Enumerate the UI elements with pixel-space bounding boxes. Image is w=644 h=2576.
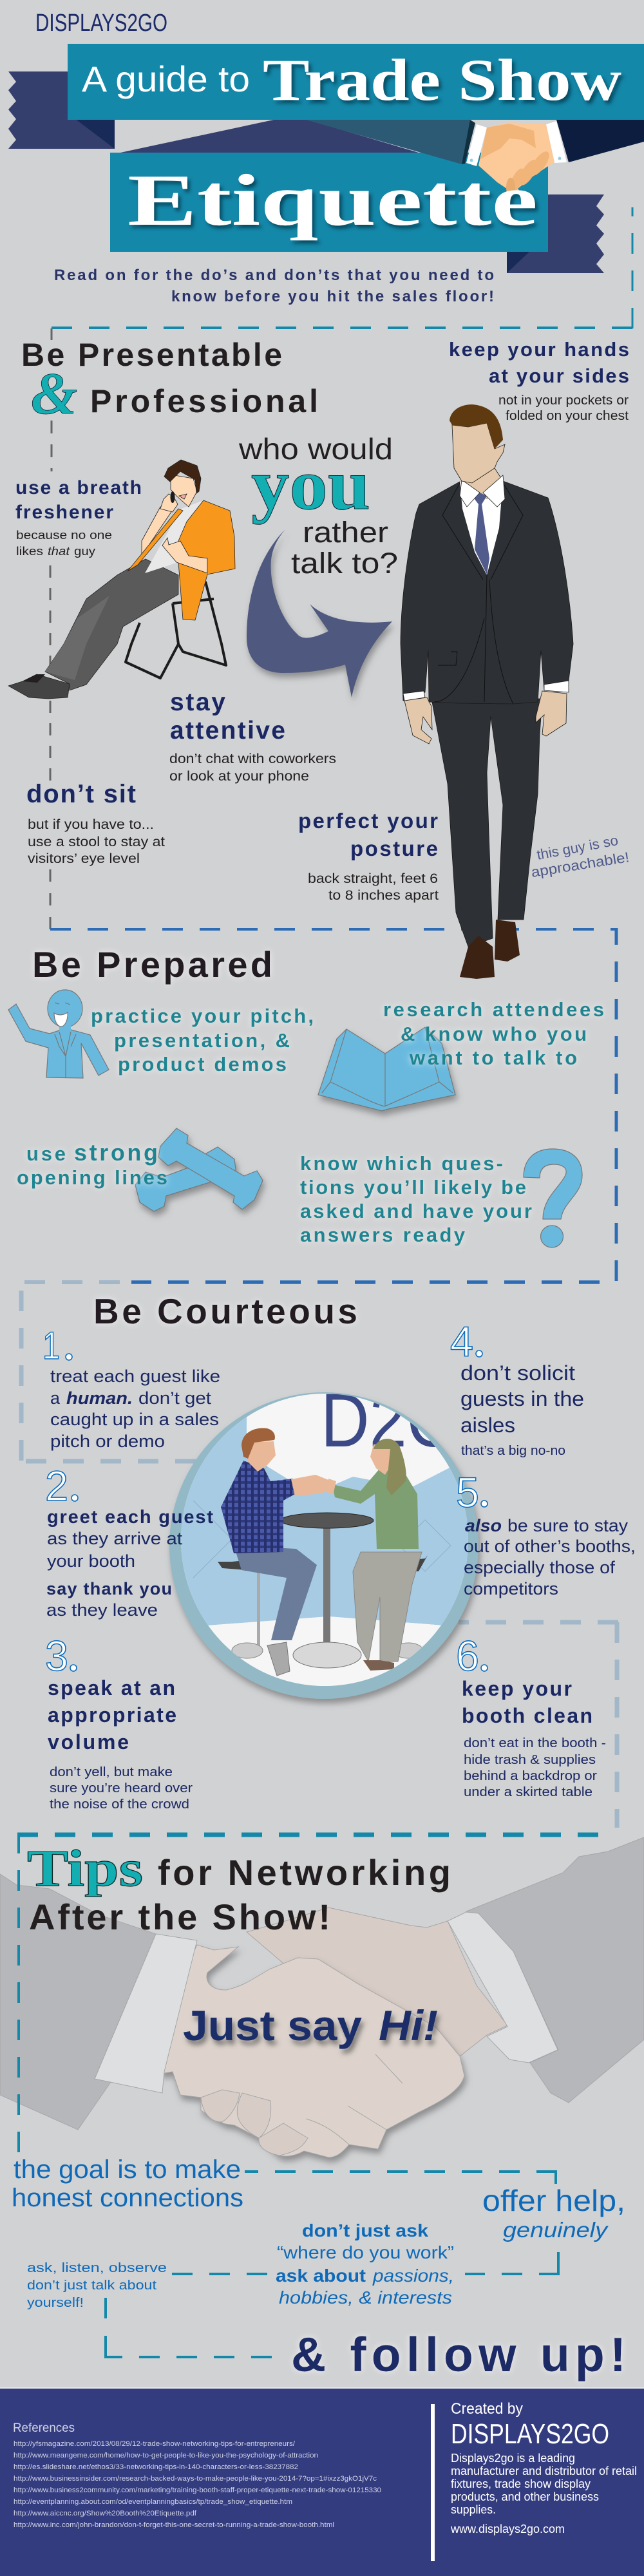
tip: practice your pitch: practice your pitch, bbox=[91, 1005, 314, 1027]
tip: keep your hands at your sides: not in your pockets or bbox=[498, 393, 629, 408]
table bbox=[281, 1513, 374, 1668]
step 6: booth clean bbox=[462, 1704, 592, 1727]
heading: Tips for Networking After the Show: for Networking bbox=[158, 1852, 451, 1893]
tip: perfect your posture: to 8 inches apart bbox=[328, 888, 439, 903]
stool right bbox=[399, 1555, 428, 1659]
tip: research attendees: want to talk to bbox=[409, 1046, 577, 1069]
tip: use a breath freshener bbox=[15, 477, 142, 558]
lapel lines bbox=[434, 483, 523, 704]
arrow pointing to suited man bbox=[247, 529, 392, 697]
illustration: man in suit bbox=[401, 404, 573, 979]
step 4: guests in the bbox=[460, 1387, 584, 1410]
tip: ask, listen, observe: don’t just talk about bbox=[27, 2278, 157, 2293]
created by block: fixtures, trade show display bbox=[451, 2477, 591, 2490]
intro text: know before you hit the sales floor! bbox=[171, 288, 494, 305]
step 4: that’s a big no-no bbox=[461, 1444, 565, 1458]
hands bbox=[404, 697, 432, 744]
step 6: keep your bbox=[462, 1677, 572, 1700]
step 3 bbox=[45, 1632, 193, 1812]
title text: Etiquette: Etiquette bbox=[128, 159, 538, 241]
title text: A guide to: A guide to bbox=[82, 59, 250, 99]
step 5 bbox=[456, 1468, 636, 1598]
step 6: don’t eat in the booth - bbox=[464, 1736, 606, 1750]
icon: open book bbox=[318, 1027, 455, 1111]
tip: use a breath freshener: guy bbox=[74, 545, 95, 558]
step 6 bbox=[456, 1632, 606, 1799]
tip: don't sit: use a stool to stay at bbox=[28, 835, 165, 849]
tip: don't sit: but if you have to... bbox=[28, 817, 154, 832]
logo: Displays2go: DISPLAYS2GO bbox=[35, 10, 167, 37]
banner bottom bbox=[110, 153, 548, 252]
tip: perfect your posture: posture bbox=[350, 837, 438, 860]
references: http://www.businessinsider.com/research-backed-ways-to-make-people-like-you-2014-7?op=1#ixzz3gkO1jV7c bbox=[14, 2475, 377, 2483]
tip: practice your pitch: product demos bbox=[118, 1053, 287, 1075]
tip: keep your hands at your sides: folded on your chest bbox=[506, 409, 629, 423]
step 3: the noise of the crowd bbox=[50, 1797, 189, 1812]
callout: Just say Hi!: Just say bbox=[183, 2002, 362, 2049]
ribbon fold left bbox=[64, 111, 115, 149]
step 6: 6 bbox=[456, 1632, 479, 1680]
tip: ask, listen, observe: yourself! bbox=[27, 2296, 84, 2310]
step 2: say thank you bbox=[46, 1579, 172, 1598]
heading: Tips for Networking After the Show bbox=[27, 1841, 451, 1937]
callout: Just say Hi! bbox=[183, 2002, 438, 2049]
face bbox=[171, 475, 197, 507]
tip: keep your hands at your sides: at your sides bbox=[489, 365, 629, 387]
man bbox=[221, 1428, 332, 1676]
question: who would you rather talk to: you bbox=[251, 445, 370, 525]
references: http://www.aiccnc.org/Show%20Booth%20Etiquette.pdf bbox=[14, 2510, 197, 2517]
tip: stay attentive: don’t chat with coworkers bbox=[169, 752, 336, 766]
footer panel bbox=[0, 2387, 644, 2576]
created by block: products, and other business bbox=[451, 2490, 599, 2503]
heading: Be Presentable & Professional bbox=[21, 337, 318, 426]
legs bbox=[45, 559, 178, 690]
lower hand bbox=[162, 538, 207, 573]
background illustration: large pale handshake bbox=[0, 1837, 644, 2157]
tip: use a breath freshener: use a breath bbox=[15, 477, 142, 498]
icon: bones bbox=[135, 1128, 263, 1211]
step 2: your booth bbox=[47, 1551, 135, 1571]
icon: handshake bbox=[306, 120, 644, 197]
raised arm bbox=[142, 504, 176, 556]
tie bbox=[472, 493, 489, 574]
created by block: manufacturer and distributor of retail bbox=[451, 2465, 637, 2477]
step 5: be sure to stay bbox=[507, 1516, 629, 1535]
callout: this guy is so approachable: approachable! bbox=[530, 849, 630, 880]
tip: perfect your posture bbox=[298, 809, 439, 903]
references: References bbox=[13, 2421, 75, 2435]
step 1: human. bbox=[66, 1388, 133, 1408]
step 5: also bbox=[465, 1516, 502, 1535]
step 3: appropriate bbox=[48, 1703, 176, 1727]
step 2: greet each guest bbox=[47, 1507, 213, 1528]
tip: use a breath freshener: because no one bbox=[16, 529, 112, 542]
question: who would you rather talk to: talk to? bbox=[291, 547, 398, 580]
photo circle: two people shaking hands at a booth bbox=[169, 1378, 480, 1699]
step 5: competitors bbox=[464, 1579, 558, 1598]
pants bbox=[431, 699, 542, 947]
ribbon fold right bbox=[507, 252, 529, 273]
face bbox=[452, 423, 505, 483]
photo circle: two people shaking hands at a booth: D2G bbox=[321, 1378, 459, 1463]
stool left bbox=[218, 1558, 265, 1658]
created by block: www.displays2go.com bbox=[450, 2523, 565, 2535]
tip: stay attentive bbox=[169, 688, 336, 784]
step 3: 3 bbox=[45, 1632, 68, 1680]
step 1: a bbox=[50, 1388, 61, 1408]
step 6: under a skirted table bbox=[464, 1785, 592, 1799]
tip: research attendees bbox=[383, 998, 604, 1069]
tip: stay attentive: attentive bbox=[170, 717, 285, 744]
tip: don't just ask where do you work: hobbies, & interests bbox=[279, 2287, 452, 2307]
created by block: supplies. bbox=[451, 2503, 496, 2516]
step 4: aisles bbox=[460, 1414, 515, 1437]
tip: don't just ask where do you work: “where do you work” bbox=[277, 2242, 454, 2262]
title text: Trade Show: Trade Show bbox=[263, 47, 621, 113]
title banner bbox=[8, 44, 644, 273]
shirt bbox=[460, 481, 503, 575]
step 1: treat each guest like bbox=[50, 1367, 220, 1386]
step 3: speak at an bbox=[48, 1676, 175, 1700]
tip: use strong opening lines bbox=[17, 1139, 167, 1189]
heading: & follow up!: & follow up! bbox=[291, 2327, 626, 2382]
tip: use a breath freshener: likes bbox=[16, 545, 43, 558]
tip: research attendees: & know who you bbox=[401, 1023, 587, 1045]
shoe bbox=[8, 674, 70, 699]
step 3: volume bbox=[48, 1730, 129, 1754]
step 4: don’t solicit bbox=[460, 1361, 575, 1385]
references: http://eventplanning.about.com/od/eventplanningbasics/tp/trade_show_etiquette.htm bbox=[14, 2498, 292, 2506]
tip: offer help genuinely: genuinely bbox=[503, 2218, 609, 2242]
tip: know which questions: tions you’ll likely be bbox=[300, 1176, 526, 1198]
tip: keep your hands at your sides bbox=[449, 338, 629, 423]
divider bar bbox=[431, 2404, 435, 2561]
references: http://www.meangeme.com/home/how-to-get-people-to-like-you-the-psychology-of-attraction bbox=[14, 2452, 318, 2459]
middle ribbon connector bbox=[120, 120, 419, 153]
tip: practice your pitch: presentation, & bbox=[114, 1029, 290, 1052]
callout: this guy is so approachable bbox=[530, 832, 630, 880]
references bbox=[13, 2421, 381, 2529]
chair bbox=[126, 582, 226, 678]
collar bbox=[460, 475, 505, 507]
question: who would you rather talk to bbox=[238, 432, 398, 580]
tip: use a breath freshener: freshener bbox=[15, 502, 113, 523]
tip: don't sit bbox=[26, 780, 165, 866]
question: who would you rather talk to: rather bbox=[303, 516, 388, 549]
step 3: sure you’re heard over bbox=[50, 1781, 193, 1795]
created by block: Created by bbox=[451, 2400, 523, 2418]
icon: question mark bbox=[524, 1149, 582, 1247]
tip: perfect your posture: back straight, feet 6 bbox=[308, 871, 438, 886]
heading: Tips for Networking After the Show: Tips bbox=[27, 1841, 143, 1897]
tip: don't sit: don’t sit bbox=[26, 780, 136, 808]
references: http://www.inc.com/john-brandon/don-t-forget-this-one-secret-to-running-a-trade-show-booth.html bbox=[14, 2521, 334, 2529]
tip: stay attentive: or look at your phone bbox=[169, 769, 309, 784]
tip: know which questions: asked and have your bbox=[300, 1200, 532, 1222]
tip: perfect your posture: perfect your bbox=[298, 809, 438, 833]
icon: presenter figure bbox=[8, 990, 109, 1078]
hand holding phone bbox=[160, 494, 178, 512]
step 6: behind a backdrop or bbox=[464, 1769, 597, 1783]
tip: the goal is to make honest connections: the goal is to make bbox=[14, 2155, 241, 2184]
created by block: Displays2go is a leading bbox=[451, 2452, 575, 2465]
heading: Be Presentable & Professional: Be Presentable bbox=[21, 337, 282, 373]
tip: use strong opening lines: use bbox=[26, 1142, 66, 1165]
tip: the goal is to make honest connections: honest connections bbox=[12, 2184, 243, 2212]
woman bbox=[327, 1439, 422, 1671]
heading: Be Presentable & Professional: Professional bbox=[90, 383, 318, 419]
tip: don't just ask where do you work: passions, bbox=[372, 2266, 454, 2286]
tip: practice your pitch bbox=[91, 1005, 314, 1075]
step 1: don’t get bbox=[138, 1388, 212, 1408]
step 4: 4 bbox=[450, 1318, 473, 1365]
references: http://www.business2community.com/marketing/training-booth-staff-proper-etiquette-next-trade-show-01215330 bbox=[14, 2486, 381, 2494]
step 3: don’t yell, but make bbox=[50, 1765, 173, 1779]
tip: offer help genuinely bbox=[482, 2184, 625, 2242]
references: http://yfsmagazine.com/2013/08/29/12-trade-show-networking-tips-for-entrepreneurs/ bbox=[14, 2440, 296, 2448]
heading: Be Prepared: Be Prepared bbox=[32, 944, 272, 985]
step 2 bbox=[45, 1462, 213, 1620]
references: http://es.slideshare.net/ethos3/33-networking-tips-in-140-characters-or-less-38237882 bbox=[14, 2463, 298, 2471]
step 2: as they leave bbox=[46, 1600, 158, 1620]
question: who would you rather talk to: who would bbox=[238, 432, 393, 466]
phone bbox=[170, 491, 175, 503]
tip: use strong opening lines: strong bbox=[74, 1139, 158, 1166]
tip: use strong opening lines: opening lines bbox=[17, 1166, 167, 1189]
heading: Be Courteous: Be Courteous bbox=[93, 1291, 357, 1331]
step 2: as they arrive at bbox=[47, 1529, 183, 1548]
step 5: especially those of bbox=[464, 1558, 616, 1577]
step 1: pitch or demo bbox=[50, 1432, 165, 1451]
step 5: out of other’s booths, bbox=[464, 1537, 636, 1556]
heading: Tips for Networking After the Show: After the Show! bbox=[29, 1897, 330, 1937]
ribbon tail left bbox=[8, 71, 115, 149]
banner top bbox=[68, 44, 644, 120]
cuffs bbox=[403, 691, 425, 701]
tip: ask, listen, observe bbox=[27, 2261, 167, 2310]
tip: don't just ask where do you work bbox=[276, 2221, 454, 2307]
hair bbox=[450, 404, 503, 449]
neck bbox=[462, 460, 503, 499]
step 1 bbox=[43, 1324, 220, 1451]
shirt bbox=[145, 500, 204, 573]
ribbon tail right bbox=[507, 194, 604, 273]
step 5: 5 bbox=[456, 1468, 479, 1516]
illustration: slouching man on phone bbox=[8, 460, 235, 699]
tie bbox=[128, 509, 183, 571]
step 1: 1 bbox=[43, 1324, 60, 1367]
intro text bbox=[54, 267, 494, 305]
intro text: Read on for the do’s and don’ts that you need to bbox=[54, 267, 494, 284]
tip: know which questions: answers ready bbox=[300, 1224, 466, 1246]
heading: Be Presentable & Professional: & bbox=[31, 361, 77, 426]
tip: the goal is to make honest connections bbox=[12, 2155, 243, 2212]
callout: this guy is so approachable: this guy is so bbox=[535, 832, 620, 863]
created by block bbox=[450, 2400, 637, 2535]
tip: know which questions bbox=[300, 1152, 532, 1246]
tip: ask, listen, observe: ask, listen, observe bbox=[27, 2261, 167, 2275]
step 4 bbox=[450, 1318, 584, 1458]
step 2: 2 bbox=[45, 1462, 68, 1510]
step 6: hide trash & supplies bbox=[464, 1753, 596, 1767]
shoe left bbox=[460, 936, 495, 979]
hair bbox=[164, 460, 201, 493]
created by block: DISPLAYS2GO bbox=[451, 2418, 609, 2450]
step 1: caught up in a sales bbox=[50, 1410, 219, 1429]
tip: stay attentive: stay bbox=[170, 688, 225, 716]
tip: don't just ask where do you work: don’t just ask bbox=[302, 2221, 428, 2240]
tip: offer help genuinely: offer help, bbox=[482, 2184, 625, 2217]
shoe right bbox=[495, 920, 520, 961]
tip: research attendees: research attendees bbox=[383, 998, 604, 1021]
jacket bbox=[401, 481, 573, 704]
jacket bbox=[178, 500, 235, 620]
tip: don't sit: visitors’ eye level bbox=[28, 851, 140, 866]
mouth bbox=[179, 494, 187, 499]
tip: use a breath freshener: that bbox=[48, 545, 70, 558]
tip: know which questions: know which ques- bbox=[300, 1152, 503, 1175]
tip: keep your hands at your sides: keep your hands bbox=[449, 338, 629, 361]
tip: don't just ask where do you work: ask about bbox=[276, 2266, 366, 2286]
callout: Just say Hi!: Hi! bbox=[379, 2002, 438, 2049]
